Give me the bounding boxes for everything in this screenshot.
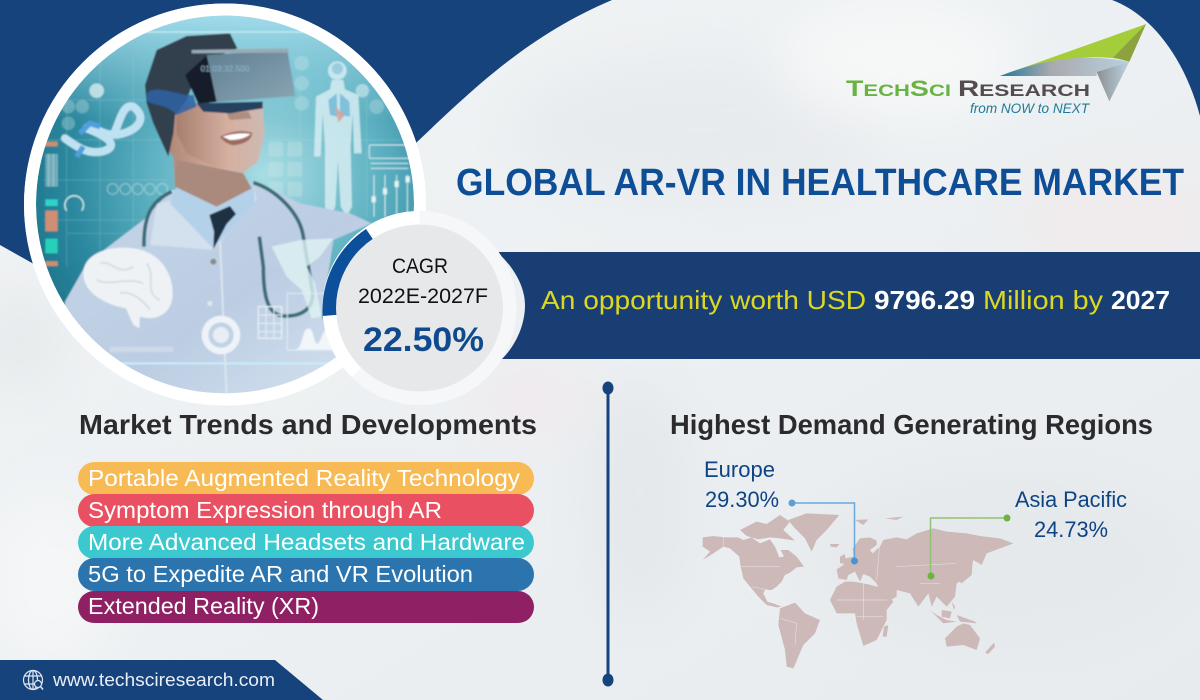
trend pill: 5G: 5G to Expedite AR and VR Evolution bbox=[88, 561, 473, 587]
banner text: opportunity bbox=[541, 285, 1170, 315]
panel: market trends bbox=[78, 409, 537, 623]
callout: Europe: Europe bbox=[704, 457, 775, 482]
logo mark bbox=[1000, 24, 1146, 101]
hud playback dots bbox=[107, 184, 168, 194]
neck and face bbox=[168, 114, 266, 184]
trend pill: headsets: More Advanced Headsets and Hardware bbox=[88, 529, 525, 555]
callout: Asia Pacific bbox=[928, 487, 1127, 580]
website: www.techsciresearch.com bbox=[52, 670, 275, 690]
callout: Europe: 29.30% bbox=[705, 487, 779, 512]
banner text: opportunity: 9796.29 bbox=[874, 285, 975, 315]
opportunity banner bbox=[497, 252, 1200, 359]
hud left bars bbox=[45, 142, 83, 266]
panel: regions bbox=[670, 409, 1153, 668]
trend pill: XR: Extended Reality (XR) bbox=[88, 593, 319, 619]
CAGR badge bbox=[322, 211, 516, 405]
CAGR label: CAGR bbox=[392, 255, 448, 278]
VR headset bbox=[185, 55, 218, 104]
trend pill: 5G bbox=[78, 558, 534, 591]
logo: TechSci Research bbox=[846, 24, 1146, 116]
trend pill: symptom expression: Symptom Expression through AR bbox=[88, 497, 442, 523]
callout: Asia Pacific: Asia Pacific bbox=[1015, 487, 1127, 512]
logo: TechSci Research: R ESEARCH bbox=[958, 76, 1090, 101]
hologram world map bbox=[272, 238, 333, 318]
banner text: opportunity: Million by bbox=[983, 285, 1103, 315]
blue header shape: top right corner bbox=[1112, 0, 1200, 116]
banner text: opportunity: An opportunity worth USD bbox=[541, 285, 866, 315]
trend pill: XR bbox=[78, 591, 534, 623]
shirt bbox=[170, 182, 255, 248]
CAGR value: 22.50% bbox=[363, 321, 484, 359]
banner text: opportunity: 2027 bbox=[1111, 285, 1170, 315]
colon model bbox=[65, 106, 140, 152]
dial icon bbox=[202, 316, 240, 354]
CAGR period: 2022E-2027F bbox=[358, 285, 488, 308]
heading: regions: Highest Demand Generating Regions bbox=[670, 409, 1153, 440]
callout: Europe bbox=[704, 457, 858, 564]
footer bar bbox=[0, 660, 323, 700]
body scan figure bbox=[314, 61, 362, 217]
hud grid bbox=[43, 32, 400, 267]
tie bbox=[209, 206, 236, 249]
divider bbox=[602, 382, 614, 686]
trend pill: portable AR: Portable Augmented Reality Technology bbox=[88, 465, 521, 491]
heading: market trends: Market Trends and Developments bbox=[79, 409, 537, 440]
hud tiles bbox=[62, 56, 384, 197]
world map bbox=[703, 513, 1013, 668]
photo: doctor with VR headset: 01:03:32.500 bbox=[201, 65, 250, 74]
stethoscope bbox=[144, 183, 313, 316]
logo wordmark: TECH S CI bbox=[846, 76, 951, 101]
keypad and chart hologram bbox=[258, 293, 333, 350]
hair bbox=[145, 33, 237, 157]
hud sliders bbox=[369, 145, 409, 217]
photo: doctor with VR headset bbox=[24, 4, 426, 406]
trend pill: symptom expression bbox=[78, 494, 534, 527]
icon: globe bbox=[24, 670, 43, 690]
logo tagline: from NOW to NEXT bbox=[970, 100, 1090, 116]
brain hologram bbox=[83, 248, 173, 328]
blue header shape: top left bbox=[0, 0, 612, 370]
callout: Asia Pacific: 24.73% bbox=[1034, 517, 1108, 542]
lab coat bbox=[65, 182, 372, 400]
